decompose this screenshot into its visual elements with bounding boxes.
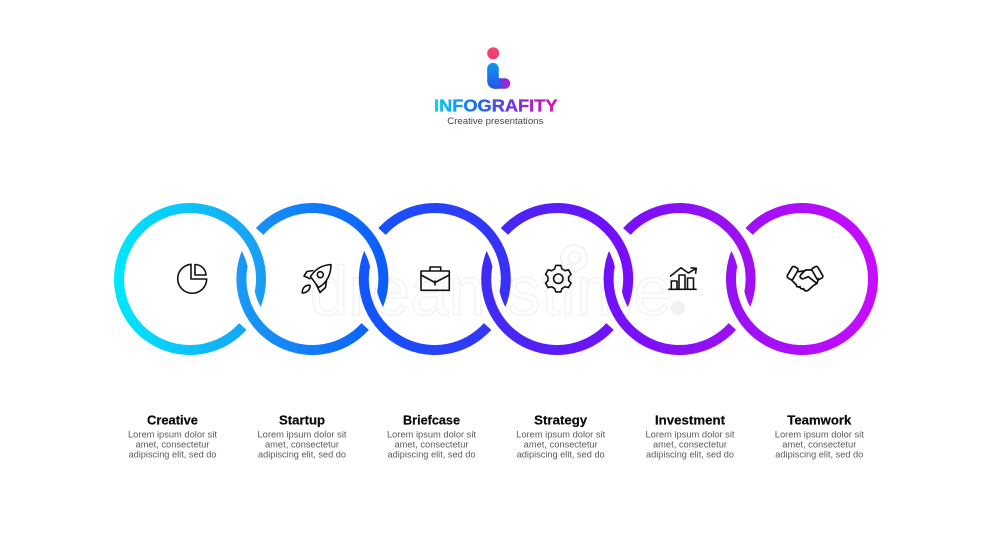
logo stem: [487, 63, 503, 89]
icon: briefcase: [421, 267, 449, 290]
label: Investment: adipiscing elit, sed do: [646, 450, 734, 460]
icon: gear: [546, 265, 571, 292]
ring 6: [726, 203, 878, 355]
ring 3: [359, 203, 511, 355]
label: Teamwork: Lorem ipsum dolor sit: [775, 430, 864, 440]
label: Creative: amet, consectetur: [136, 440, 210, 450]
label: Startup: adipiscing elit, sed do: [258, 450, 346, 460]
logo: [487, 47, 505, 89]
icon: handshake: [786, 266, 824, 291]
label: Teamwork: adipiscing elit, sed do: [775, 450, 863, 460]
title: INFOGRAFITY: [434, 96, 558, 116]
icon: bar chart with arrow: [668, 268, 697, 289]
label: Creative: Creative: [147, 413, 198, 427]
label: Strategy: Strategy: [534, 413, 587, 427]
ring 4: [481, 203, 633, 355]
label: Strategy: Lorem ipsum dolor sit: [516, 430, 606, 440]
label: Creative: Lorem ipsum dolor sit: [128, 430, 217, 440]
label: Startup: [258, 413, 347, 460]
label: Strategy: amet, consectetur: [524, 440, 598, 450]
icon: rocket: [302, 264, 331, 293]
label: Investment: Investment: [655, 413, 726, 427]
subtitle: Creative presentations: [447, 116, 543, 127]
label: Teamwork: [775, 413, 864, 460]
ring 1: [114, 203, 266, 355]
ring 2: [236, 203, 388, 355]
label: Briefcase: Briefcase: [403, 413, 460, 427]
watermark: dreamstime: [310, 252, 672, 330]
label: Briefcase: [387, 413, 476, 460]
logo foot: [496, 78, 505, 89]
label: Investment: amet, consectetur: [653, 440, 727, 450]
icon: pie chart: [178, 264, 207, 293]
label: Teamwork: amet, consectetur: [782, 440, 856, 450]
label: Teamwork: Teamwork: [787, 413, 851, 427]
logo dot: [487, 47, 499, 59]
label: Investment: [646, 413, 735, 460]
label: Briefcase: amet, consectetur: [394, 440, 468, 450]
label: Strategy: [516, 413, 606, 460]
label: Startup: Startup: [279, 413, 325, 427]
label: Creative: adipiscing elit, sed do: [128, 450, 216, 460]
label: Investment: Lorem ipsum dolor sit: [646, 430, 735, 440]
label: Startup: amet, consectetur: [265, 440, 339, 450]
label: Strategy: adipiscing elit, sed do: [517, 450, 605, 460]
label: Briefcase: adipiscing elit, sed do: [388, 450, 476, 460]
label: Briefcase: Lorem ipsum dolor sit: [387, 430, 476, 440]
label: Startup: Lorem ipsum dolor sit: [258, 430, 347, 440]
ring 5: [604, 203, 756, 355]
label: Creative: [128, 413, 217, 460]
